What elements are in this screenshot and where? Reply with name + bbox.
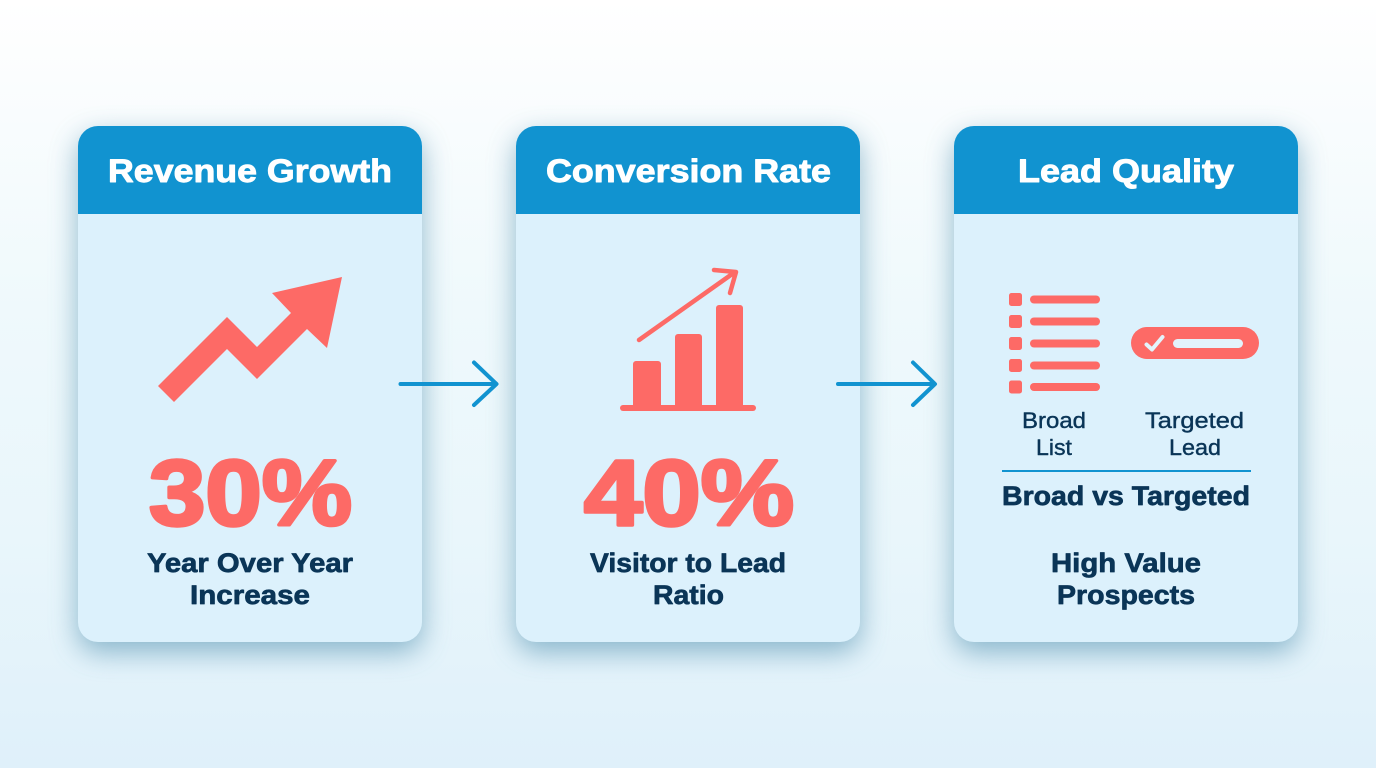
icon: broad list	[1009, 293, 1100, 394]
label: broad list: Broad	[1022, 408, 1086, 433]
label: targeted lead: Targeted	[1145, 408, 1244, 433]
heading: conversion rate: Conversion Rate	[546, 153, 831, 189]
label: high value prospects: Prospects	[1057, 580, 1195, 610]
label: year over year increase: Year Over Year	[147, 548, 354, 578]
panel: revenue growth	[78, 126, 422, 652]
label: visitor to lead ratio: Visitor to Lead	[590, 548, 786, 578]
label: targeted lead: Lead	[1169, 435, 1221, 460]
panel: lead quality	[954, 126, 1298, 652]
label: year over year increase: Increase	[190, 580, 310, 610]
icon: bar chart with arrow	[620, 270, 756, 411]
icon: rising zigzag arrow	[158, 277, 342, 402]
arrow: revenue growth to conversion rate	[400, 362, 496, 405]
heading: lead quality: Lead Quality	[1018, 153, 1234, 189]
arrow: conversion rate to lead quality	[838, 362, 935, 405]
subheading: broad vs targeted: Broad vs Targeted	[1002, 481, 1250, 511]
stat: 30%: 30%	[149, 441, 352, 545]
label: broad list: List	[1036, 435, 1072, 460]
heading: revenue growth: Revenue Growth	[108, 153, 392, 189]
panel: conversion rate	[516, 126, 860, 652]
label: broad list	[1022, 408, 1086, 460]
icon: targeted lead pill	[1131, 327, 1259, 359]
stat: 40%: 40%	[584, 441, 794, 545]
label: visitor to lead ratio: Ratio	[653, 580, 724, 610]
label: targeted lead	[1145, 408, 1244, 460]
label: high value prospects	[1051, 548, 1201, 610]
label: high value prospects: High Value	[1051, 548, 1201, 578]
label: year over year increase	[147, 548, 354, 610]
label: visitor to lead ratio	[590, 548, 786, 610]
